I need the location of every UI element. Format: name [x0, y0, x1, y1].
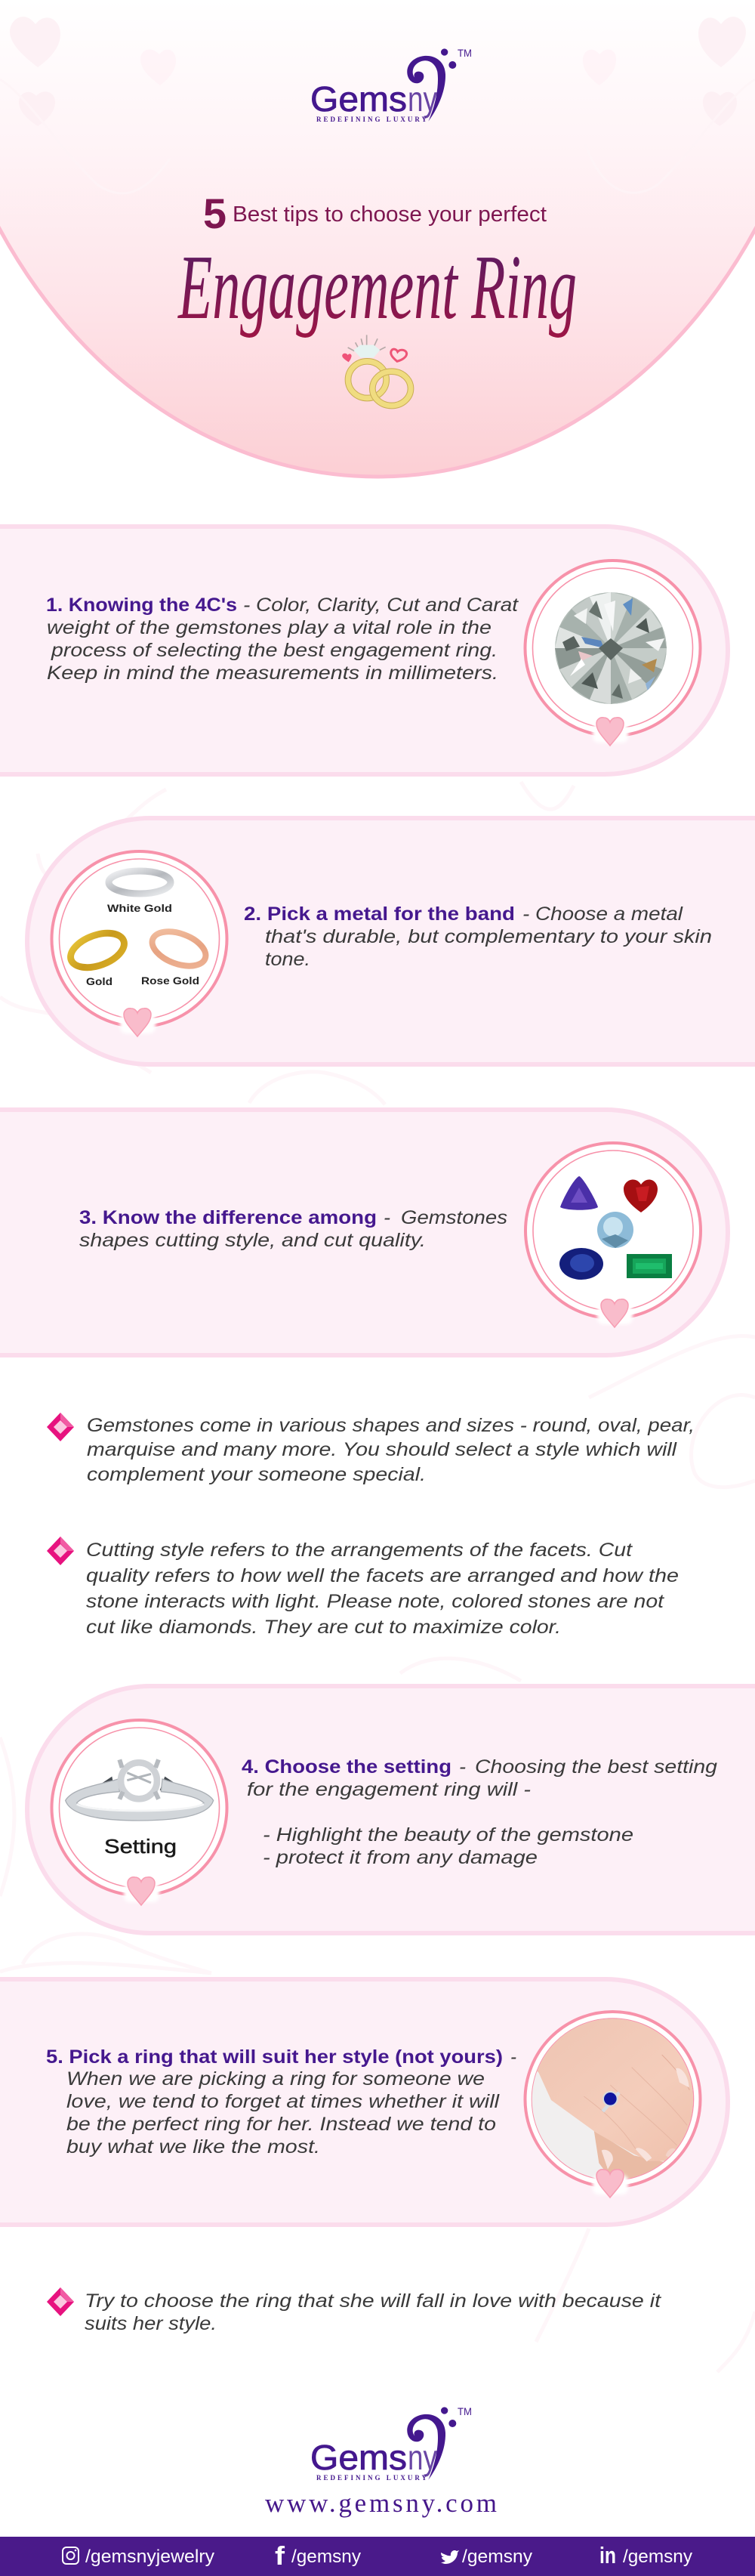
bullet text — [85, 2290, 661, 2334]
panel 5 text: 5. Pick a ring that will suit her style (not yours) — [46, 2046, 503, 2068]
background decorations — [0, 782, 755, 2372]
gem: trillion tanzanite — [560, 1176, 598, 1210]
badge: metal rings — [51, 851, 226, 1036]
gem: round aquamarine — [597, 1212, 633, 1248]
panel 4 text: for the engagement ring will - — [247, 1779, 531, 1800]
logo: footer — [310, 2405, 472, 2482]
bullet text: cut like diamonds. They are cut to maximize color. — [86, 1617, 561, 1638]
panel 4 text: - protect it from any damage — [263, 1847, 538, 1868]
panel 4: choose the setting — [27, 1686, 755, 1933]
panel 4 text: - Highlight the beauty of the gemstone — [263, 1824, 633, 1846]
panel 1: knowing the 4Cs — [0, 527, 728, 774]
heart ornament — [593, 2170, 628, 2198]
panel 3: know the difference — [0, 1110, 728, 1355]
logo: header — [310, 47, 472, 123]
panel 2 text — [244, 903, 712, 970]
panel 3 text: 3. Know the difference among — [79, 1207, 377, 1228]
setting label: Setting — [104, 1835, 177, 1858]
social footer bar — [0, 2537, 755, 2576]
panel 5 text: buy what we like the most. — [66, 2136, 320, 2157]
ring setting illustration — [66, 1759, 214, 1821]
heart ornament — [593, 718, 628, 746]
panel 2 background — [27, 818, 755, 1064]
panel 3 background — [0, 1110, 728, 1355]
white gold ring — [107, 871, 172, 914]
bullet: choose what suits her — [47, 2287, 661, 2334]
facebook: /gemsny — [291, 2547, 361, 2567]
gem: heart ruby — [624, 1179, 658, 1212]
badge: diamond — [525, 561, 701, 746]
bullet text: quality refers to how well the facets are arranged and how the — [86, 1565, 679, 1586]
panel 2: pick a metal — [27, 818, 755, 1064]
bullet text: stone interacts with light. Please note, colored stones are not — [86, 1591, 664, 1612]
hand photo illustration — [532, 2018, 693, 2179]
linkedin — [599, 2542, 692, 2568]
bullet: shapes and sizes — [47, 1413, 695, 1485]
bullet text: complement your someone special. — [87, 1464, 426, 1485]
logo: header: TM — [458, 47, 472, 59]
linkedin: /gemsny — [623, 2547, 692, 2567]
icon: wedding rings with hearts — [342, 335, 411, 406]
panel 1 text — [46, 595, 519, 684]
badge: gemstones — [525, 1143, 701, 1327]
gem: oval sapphire — [559, 1248, 603, 1280]
bullet: cutting style — [47, 1537, 679, 1638]
panel 4 background — [27, 1686, 755, 1933]
subtitle — [203, 190, 547, 237]
panel 5 text — [46, 2046, 516, 2157]
instagram: /gemsnyjewelry — [85, 2547, 214, 2567]
panel 1 text: Keep in mind the measurements in millimeters. — [47, 663, 498, 684]
heart ornament — [124, 1877, 159, 1905]
linkedin: in — [599, 2542, 616, 2568]
panel 1 text: - Color, Clarity, Cut and Carat — [243, 595, 519, 616]
logo: footer: REDEFINING LUXURY — [316, 2474, 427, 2482]
panel 5 text: When we are picking a ring for someone we — [66, 2068, 485, 2090]
bullet text — [86, 1540, 679, 1638]
panel 1 text: 1. Knowing the 4C's — [46, 595, 237, 616]
logo: header: REDEFINING LUXURY — [316, 116, 427, 123]
panel 4 text: - — [459, 1756, 466, 1778]
panel 2 text: - Choose a metal — [522, 903, 684, 925]
bullet text: Cutting style refers to the arrangements of the facets. Cut — [86, 1540, 633, 1561]
panel 3 text: shapes cutting style, and cut quality. — [79, 1230, 426, 1251]
gold ring: Gold — [86, 975, 112, 987]
panel 4 text: 4. Choose the setting — [242, 1756, 451, 1778]
panel 5 background — [0, 1979, 728, 2225]
bullet text: suits her style. — [85, 2313, 217, 2334]
panel 2 text: that's durable, but complementary to your skin — [265, 926, 712, 947]
rose gold ring — [141, 925, 211, 987]
gold ring — [66, 927, 129, 987]
subtitle: 5 — [203, 190, 226, 237]
bullet text: marquise and many more. You should select a style which will — [87, 1439, 678, 1460]
heart ornament — [597, 1299, 633, 1327]
panel 5 text: - — [510, 2046, 516, 2068]
badge: hand with ring — [525, 2012, 701, 2198]
panel 3 text: Gemstones — [401, 1207, 507, 1228]
icon: pink gem bullet — [47, 1413, 74, 1441]
icon: pink gem bullet — [47, 2287, 74, 2316]
logo: footer: TM — [458, 2405, 472, 2417]
white gold ring: White Gold — [107, 902, 172, 914]
facebook — [275, 2542, 361, 2571]
panel 1 background — [0, 527, 728, 774]
logo: footer: ny — [408, 2438, 437, 2477]
facebook: f — [275, 2542, 285, 2571]
bullet text: Try to choose the ring that she will fall in love with because it — [85, 2290, 661, 2312]
heart ornament — [120, 1008, 156, 1036]
panel 4 text — [242, 1756, 717, 1868]
gem: emerald — [627, 1254, 672, 1278]
twitter: /gemsny — [462, 2547, 532, 2567]
panel 1 text: process of selecting the best engagement ring. — [51, 640, 498, 661]
panel 2 text: 2. Pick a metal for the band — [244, 903, 515, 925]
bullet text — [87, 1415, 695, 1485]
bullet text: Gemstones come in various shapes and sizes - round, oval, pear, — [87, 1415, 695, 1436]
logo: footer: Gems — [310, 2438, 407, 2477]
subtitle: Best tips to choose your perfect — [233, 202, 547, 227]
panel 1 text: weight of the gemstones play a vital role in the — [47, 617, 492, 638]
logo: header: Gems — [310, 79, 407, 119]
panel 5 text: love, we tend to forget at times whether it will — [66, 2091, 501, 2112]
website url: www.gemsny.com — [265, 2488, 497, 2518]
badge: ring setting — [51, 1720, 226, 1905]
header arc background — [0, 0, 755, 477]
rose gold ring: Rose Gold — [141, 974, 199, 987]
panel 4 text: Choosing the best setting — [475, 1756, 717, 1778]
panel 5: pick a ring that suits her — [0, 1979, 728, 2225]
panel 3 text — [79, 1207, 507, 1251]
panel 2 text: tone. — [265, 949, 310, 970]
icon: pink gem bullet — [47, 1537, 74, 1565]
panel 5 text: be the perfect ring for her. Instead we tend to — [66, 2114, 496, 2135]
decorative corner hearts — [0, 17, 755, 193]
logo: header: ny — [408, 79, 437, 119]
panel 3 text: - — [384, 1207, 390, 1228]
